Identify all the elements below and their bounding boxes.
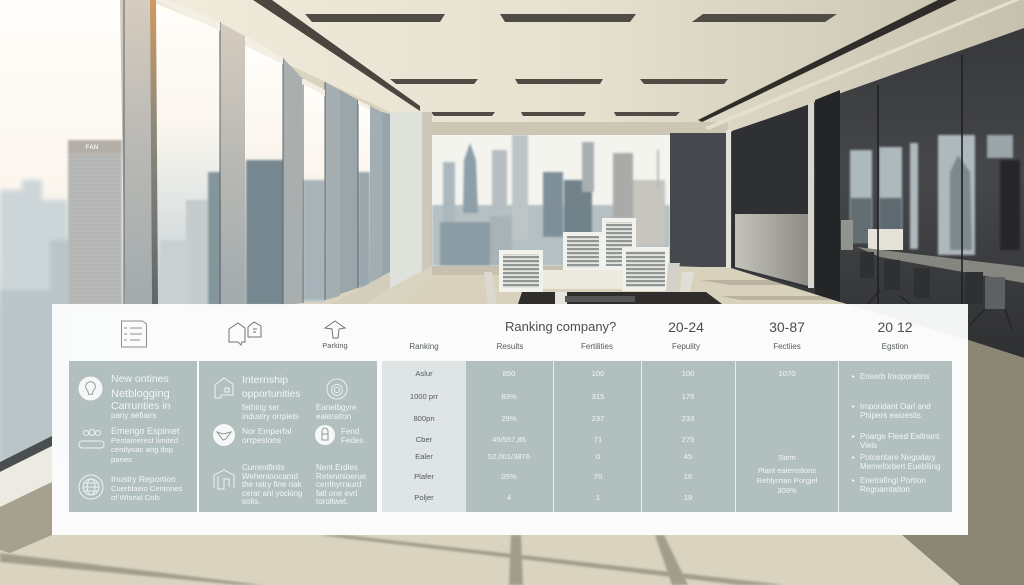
icon: speech bubbles <box>228 321 262 346</box>
text: Currentfinlis block <box>242 463 302 506</box>
text: Emerigo Espimet block: Pestainerest limited <box>111 436 178 445</box>
text: Nent Erdles block: fatl one evrl <box>316 489 357 498</box>
fertilities column: 0 <box>596 452 600 461</box>
text: Inustry Reportion block: Inustry Reportion <box>111 474 176 484</box>
cabinet glass section <box>732 105 808 288</box>
icon: checklist document <box>121 320 147 348</box>
text: Nent Erdles block: toroltwet. <box>316 497 348 506</box>
icon: light bulb <box>78 376 102 400</box>
text: Inustry Reportion block <box>111 474 182 502</box>
text: Emerigo Espimet block: panes <box>111 455 132 464</box>
text: Inustry Reportion block: Cuerblaeio Centones <box>111 484 182 493</box>
ceiling <box>150 0 1024 132</box>
row labels: Plafer <box>414 472 434 481</box>
tower with sign <box>68 140 122 310</box>
results column: 29% <box>501 414 517 423</box>
text: Fend Fedes: Fedes <box>341 436 363 444</box>
window panes <box>155 3 370 305</box>
column divider <box>838 361 839 512</box>
right floor <box>902 340 1024 585</box>
fectiies column <box>757 369 817 495</box>
fertilities column <box>592 369 604 502</box>
text: Internship: Internship <box>242 374 288 386</box>
results column: 45/557,85 <box>492 435 526 444</box>
text: opportunities: opportunities <box>242 389 300 400</box>
panel: white data card <box>52 304 968 535</box>
column label: Ranking: Ranking <box>409 342 439 351</box>
heading: 20 12: 20 12 <box>877 319 913 335</box>
egstion bullet list: Imporidant Oarl and <box>860 402 931 411</box>
ceiling vents <box>305 14 837 116</box>
fepulity column: 175 <box>682 392 694 401</box>
icon: globe <box>78 474 104 500</box>
white column <box>390 112 422 290</box>
text: Currentfinlis block: the ratry fine riak <box>242 480 302 489</box>
fertilities column: 1 <box>596 493 600 502</box>
right glass wall <box>731 28 1024 358</box>
carpet corner <box>0 482 52 553</box>
icon: house outline <box>214 378 234 398</box>
icon: target ring <box>326 378 348 400</box>
egstion bullet list: Potcentare Negodary <box>860 453 936 462</box>
icon: ranking arrow <box>324 320 346 338</box>
egstion bullet list <box>852 372 940 494</box>
white transoms <box>156 0 370 110</box>
text: Emerigo Espimet block: centlyoac ang tlop <box>111 445 173 454</box>
fertilities column: 100 <box>592 369 604 378</box>
text: Fend Fedes <box>341 426 363 444</box>
row labels column <box>382 361 466 512</box>
panel: left feature list <box>69 361 197 512</box>
ceiling beam left <box>253 0 420 111</box>
fepulity column: 16 <box>684 472 692 481</box>
ceiling lower band over the window <box>432 122 728 135</box>
column label: Egstion: Egstion <box>882 342 908 351</box>
text: Emerigo Espimet block <box>111 426 180 464</box>
left sill below window <box>330 272 390 305</box>
row labels: Ealer <box>415 452 433 461</box>
text: Currentfinlis block: Currentfinlis <box>242 463 285 472</box>
egstion bullet list: Phipers eaioesits <box>860 411 921 420</box>
dark wall panel <box>670 133 726 267</box>
text: fething ser industry orrpiets: industry orrpiets <box>242 412 299 420</box>
table and chairs <box>543 270 623 289</box>
text: Nor Emperfal: orrpesions <box>242 434 281 444</box>
row labels: Aslur <box>415 369 433 378</box>
fertilities column: 71 <box>594 435 602 444</box>
fepulity column: 275 <box>682 435 694 444</box>
egstion bullet list: Memeforbert Eueblling <box>860 462 940 471</box>
text: Eanelbgyre: Eanelbgyre <box>316 402 356 412</box>
text: Currentfinlis block: Wehentoocamd <box>242 472 298 481</box>
window columns <box>120 0 152 305</box>
text: pany aefiairs: pany aefiairs <box>111 411 156 420</box>
results column <box>488 369 530 502</box>
left city window <box>0 0 124 462</box>
icon: handshake <box>213 424 235 446</box>
ceiling light strip <box>705 0 1020 130</box>
text: fething ser industry orrpiets <box>242 402 299 420</box>
text: Eanelbgyre: ealeraiton <box>316 412 351 420</box>
fepulity column: 100 <box>682 369 694 378</box>
text: Carrunties in: Carrunties in <box>111 400 171 412</box>
results column: 850 <box>503 369 515 378</box>
row labels: Cber <box>416 435 432 444</box>
reflected windows <box>850 135 1013 255</box>
chairs <box>860 252 983 304</box>
text: Fend Fedes: Fend <box>341 426 359 436</box>
text: New ontines: New ontines <box>111 373 169 385</box>
column divider <box>641 361 642 512</box>
text: Nor Emperfal <box>242 426 291 444</box>
column label: Fertilities: Fertilities <box>581 342 613 351</box>
results column: 52,001/3876 <box>488 452 530 461</box>
row labels: 1000 prr <box>410 392 438 401</box>
fepulity column: 19 <box>684 493 692 502</box>
text: Nent Erdles block: Retenmioerue <box>316 472 366 481</box>
egstion bullet list: Enserb Imoporatins <box>860 372 929 381</box>
fectiies column: Rehlyrrtan Porgjel <box>757 476 817 485</box>
column label: Fectiies: Fectiies <box>773 342 801 351</box>
text: Nent Erdles block: Nent Erdles <box>316 463 358 472</box>
reflected box <box>868 229 903 250</box>
heading: 30-87: 30-87 <box>769 319 805 335</box>
column label: Parking: Parking <box>322 341 348 350</box>
window shadows on floor <box>0 535 785 585</box>
column divider <box>553 361 554 512</box>
egstion bullet list: Viels <box>860 441 877 450</box>
tower sign text: FAN <box>86 144 99 151</box>
egstion bullet list: Enetrafingl Portion <box>860 476 926 485</box>
text: Inustry Reportion block: of Wtsnal Cols <box>111 493 160 502</box>
fepulity column: 233 <box>682 414 694 423</box>
row labels: Poljer <box>414 493 434 502</box>
panel: internship opportunities <box>199 361 377 512</box>
column divider <box>735 361 736 512</box>
text: Emerigo Espimet block: Emerigo Espimet <box>111 426 180 436</box>
centre window city <box>432 135 670 266</box>
row labels <box>410 369 438 502</box>
text: Nor Emperfal: Nor Emperfal <box>242 426 291 436</box>
icon: people group <box>78 429 104 448</box>
egstion bullet list: Poarge Fleed Eellnant <box>860 432 939 441</box>
results column: 4 <box>507 493 511 502</box>
egstion bullet list: Regoamtatlon <box>860 485 910 494</box>
left lower sill <box>0 436 52 472</box>
interior floor <box>400 266 870 305</box>
white units <box>501 220 667 290</box>
fectiies column: Stem <box>778 453 796 462</box>
fectiies column: Plant eatenstions <box>758 466 816 475</box>
panel: ranking table <box>382 361 952 512</box>
text: Currentfinlis block: solis. <box>242 497 260 506</box>
results column: 05% <box>501 472 517 481</box>
fertilities column: 237 <box>592 414 604 423</box>
ceiling beam right <box>698 0 957 122</box>
heading: Ranking company?: Ranking company? <box>505 319 616 334</box>
heading: 20-24: 20-24 <box>668 319 704 335</box>
text: Eanelbgyre <box>316 402 356 420</box>
results column: 83% <box>501 392 517 401</box>
conference table <box>857 247 1024 283</box>
fepulity column: 45 <box>684 452 692 461</box>
fectiies column: 309% <box>777 486 797 495</box>
column label: Fepulity: Fepulity <box>672 342 700 351</box>
text: Nent Erdles block <box>316 463 366 506</box>
row labels: 800pn <box>413 414 435 423</box>
column label: Results: Results <box>497 342 523 351</box>
fepulity column <box>682 369 694 502</box>
text: Currentfinlis block: cerar anl yocking <box>242 489 302 498</box>
icon: padlock <box>315 425 335 445</box>
text: Netblogging: Netblogging <box>111 388 170 400</box>
fectiies column: 1070 <box>779 369 795 378</box>
icon: building outline <box>214 470 234 490</box>
text: Nent Erdles block: cerrlhyrraurd <box>316 480 361 489</box>
fertilities column: 315 <box>592 392 604 401</box>
text: fething ser industry orrpiets: fething ser <box>242 402 279 412</box>
fertilities column: 70 <box>594 472 602 481</box>
